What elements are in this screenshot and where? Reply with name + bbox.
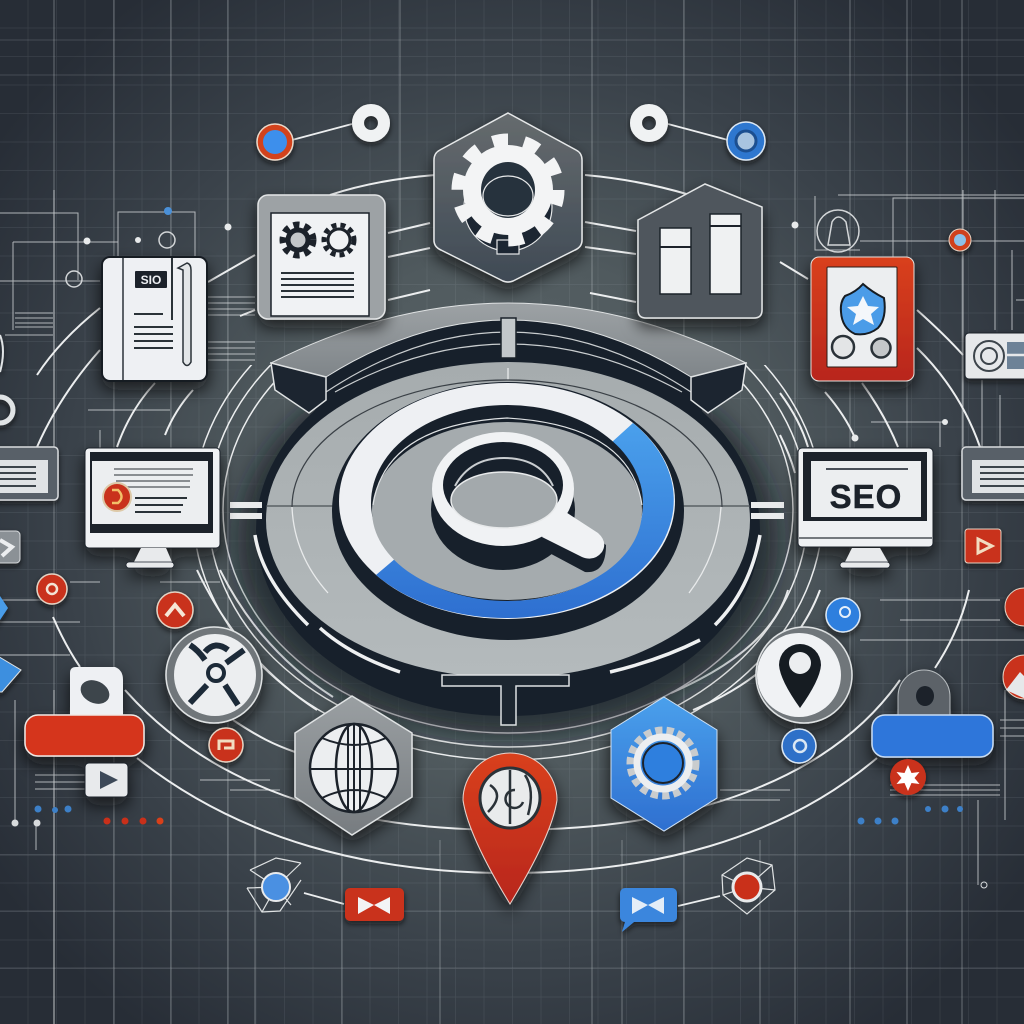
plate shadow [238,345,778,735]
outer arc band [271,303,746,377]
dark lens well [371,405,643,601]
icon: bar chart house [638,184,762,318]
stand [134,548,172,562]
lens ring [432,432,574,546]
gear outline core [328,229,350,251]
icon: red pill [25,667,144,797]
badge: right red square [965,529,1001,563]
inner band lines [326,332,691,392]
small badges [37,110,1001,795]
gear dark [283,225,313,255]
icon: outline arch [817,210,859,252]
handle underside [525,515,606,572]
network dots top [84,207,948,442]
gear outline [324,225,354,255]
card: right mid [962,447,1024,500]
badge: top left ring [358,110,384,136]
well highlight [373,418,642,505]
gear lower [464,163,552,251]
plate seams [266,505,750,507]
orbit lines [37,124,980,906]
badge: left edge blue [0,590,21,692]
badge: top left blue [257,124,293,160]
blue arc [376,423,674,618]
panel: SEO monitor [798,448,933,568]
shield [841,284,885,334]
badge: left chevron [0,531,20,563]
SEO label: SEO [830,478,902,515]
play button [85,763,128,797]
blue chat [620,888,677,932]
icon: blue pill [872,670,993,757]
node cluster red [722,858,775,914]
badge: top right small [949,229,971,251]
badge [103,483,131,511]
badge: red caret [157,592,193,628]
red chat [345,888,404,921]
inner plate [372,422,642,600]
side tick right [751,505,784,516]
icon: globe hexagon [295,696,412,835]
edge cards [0,333,1024,700]
gear dark core [288,230,308,250]
dark top band [312,320,705,420]
white ring [339,383,675,619]
corner bracket right [691,363,746,413]
badge: top right blue [727,122,765,160]
node cluster blue [247,858,301,912]
card: left [0,447,58,500]
inner dark ring [332,382,684,640]
panel: red star card [811,257,914,381]
icon: gear hexagon [434,113,582,282]
handle [542,507,604,559]
bottom network icons [12,806,987,932]
badge: red star [890,759,926,795]
central dial [230,303,784,735]
stand [845,548,888,562]
icon: red location pin [463,753,557,904]
plate [266,362,750,678]
badge: blue low [782,729,816,763]
small outline rings [66,232,175,287]
lens inner line [455,458,553,486]
badge: red left [37,574,67,604]
badge: blue right [826,598,860,632]
gear teeth [459,141,557,239]
panel: settings document [258,195,385,319]
lens hole [443,442,563,528]
plate thin arc [292,380,722,507]
bottom segmented arcs [255,535,760,672]
dots right [858,806,987,888]
icon: book: SIO [141,273,161,287]
dark base [256,344,760,716]
ring: left edge [0,397,13,423]
pen [178,263,191,366]
icon: blue gear hexagon [611,697,717,831]
gear lower teeth [497,240,519,254]
badge: right edge red [1003,588,1024,700]
icon: book [102,257,207,381]
gear hole line [483,176,533,216]
badge: top right ring [636,110,662,136]
ring: left edge upper [0,335,3,372]
corner bracket left [271,363,326,413]
badge: red low [209,728,243,762]
lens glass [451,472,557,528]
icon: magnifying glass [431,432,606,572]
side tick left [230,505,262,516]
gear disk [463,145,553,235]
icon: map pin circle [756,627,852,723]
card: right top [965,333,1024,379]
lens body [431,450,575,570]
gear hole [481,162,535,218]
dots left [12,806,164,826]
bottom tick [442,675,569,725]
plate white arcs [292,507,721,593]
label [135,271,167,288]
icon: satellite dish [166,627,262,723]
top tick [501,318,516,358]
panel: monitor left [85,448,220,568]
